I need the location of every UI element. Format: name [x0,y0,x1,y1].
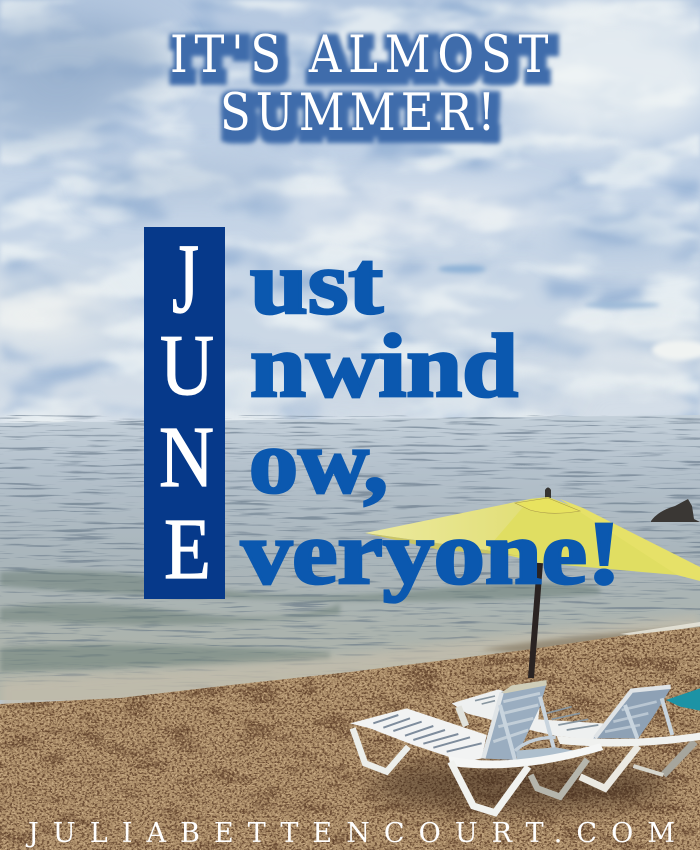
beach loungers [350,680,700,813]
rock [651,499,700,522]
word: ow,: ow, [249,413,388,512]
beach umbrella [365,488,700,678]
letter N: N [159,408,214,505]
letter J: J [172,223,199,334]
teal towel [666,688,700,711]
sand beach [0,620,700,850]
sky with clouds [0,0,700,425]
vertical JUNE acrostic bar [144,223,225,599]
rear lounger [452,687,700,788]
footer website: JULIABETTENCOURT.COM [25,818,675,849]
word: veryone!: veryone! [241,504,621,603]
acrostic words [241,234,621,603]
umbrella finial [545,488,551,500]
umbrella canopy [365,497,700,581]
title: it's almost summer: SUMMER! [220,83,495,143]
letter E: E [164,500,211,597]
umbrella pole [528,563,543,678]
title: it's almost summer: IT'S ALMOST [170,25,548,85]
word: ust: ust [250,234,383,333]
sea [0,415,700,715]
front lounger [350,680,603,813]
word: nwind: nwind [250,317,518,416]
title: it's almost summer [170,25,548,143]
letter U: U [160,316,214,413]
